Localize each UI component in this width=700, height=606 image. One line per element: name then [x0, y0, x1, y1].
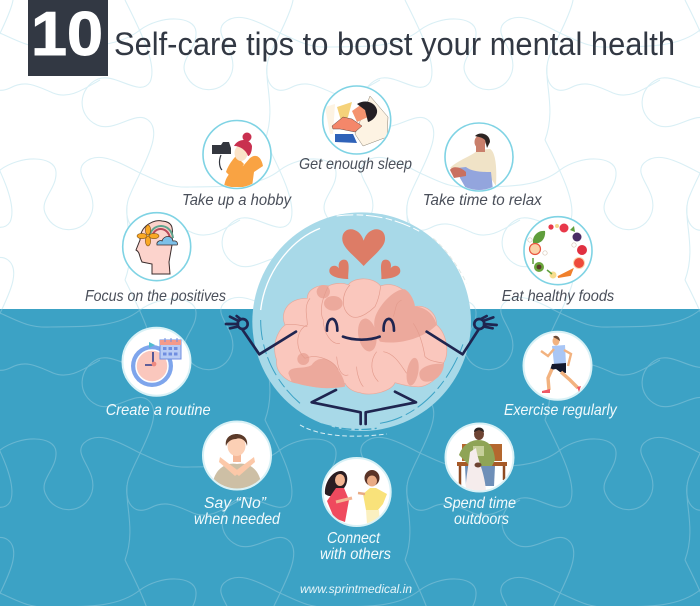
- icon: ring of fruits and vegetables: [524, 217, 592, 285]
- icon: clock and calendar: [122, 328, 190, 396]
- label: Spend time: [443, 495, 516, 512]
- label: Get enough sleep: [299, 156, 412, 173]
- central illustration: meditating brain: [226, 212, 497, 436]
- hearts: [329, 229, 400, 279]
- icon: sleeping person: [323, 86, 391, 154]
- tip: take time to relax: [423, 123, 543, 209]
- icon: person crossing arms: [203, 422, 271, 492]
- label: outdoors: [454, 511, 509, 528]
- label: with others: [320, 546, 391, 563]
- website credit: www.sprintmedical.in: [300, 582, 412, 596]
- tip: create a routine: [106, 328, 211, 419]
- label: Connect: [327, 530, 380, 547]
- tip: connect with others: [320, 458, 391, 563]
- background: white upper band with puzzle pattern: [0, 0, 700, 309]
- label: Create a routine: [106, 402, 211, 419]
- label: Eat healthy foods: [502, 288, 614, 305]
- icon: two women talking: [323, 458, 391, 526]
- label: Take time to relax: [423, 192, 543, 209]
- tip: get enough sleep: [299, 86, 412, 173]
- title: Self-care tips to boost your mental health: [114, 26, 675, 62]
- icon: man on bench with dog: [446, 424, 514, 492]
- label: Exercise regularly: [504, 402, 618, 419]
- label: [320, 530, 391, 563]
- label: Focus on the positives: [85, 288, 226, 305]
- tip: exercise regularly: [504, 332, 618, 419]
- brush circle: [252, 212, 471, 436]
- arms and legs: [226, 316, 497, 424]
- face: [327, 319, 394, 340]
- tip: eat healthy foods: [502, 217, 614, 305]
- label: Take up a hobby: [182, 192, 292, 209]
- icon: relaxing man: [445, 123, 513, 192]
- label: when needed: [194, 511, 281, 528]
- label: [194, 495, 281, 528]
- label: [443, 495, 516, 528]
- number badge: 10: 10: [31, 0, 103, 69]
- tip: take up a hobby: [182, 120, 292, 209]
- brain: [275, 279, 447, 394]
- tip: say no when needed: [194, 422, 281, 528]
- tip: focus on the positives: [85, 213, 226, 305]
- icon: head with flower and rainbow: [123, 213, 191, 281]
- background: blue lower band with puzzle pattern: [0, 309, 700, 606]
- icon: photographer: [203, 120, 271, 188]
- icon: runner: [524, 332, 592, 400]
- tip: spend time outdoors: [443, 424, 516, 528]
- label: Say “No”: [204, 495, 267, 512]
